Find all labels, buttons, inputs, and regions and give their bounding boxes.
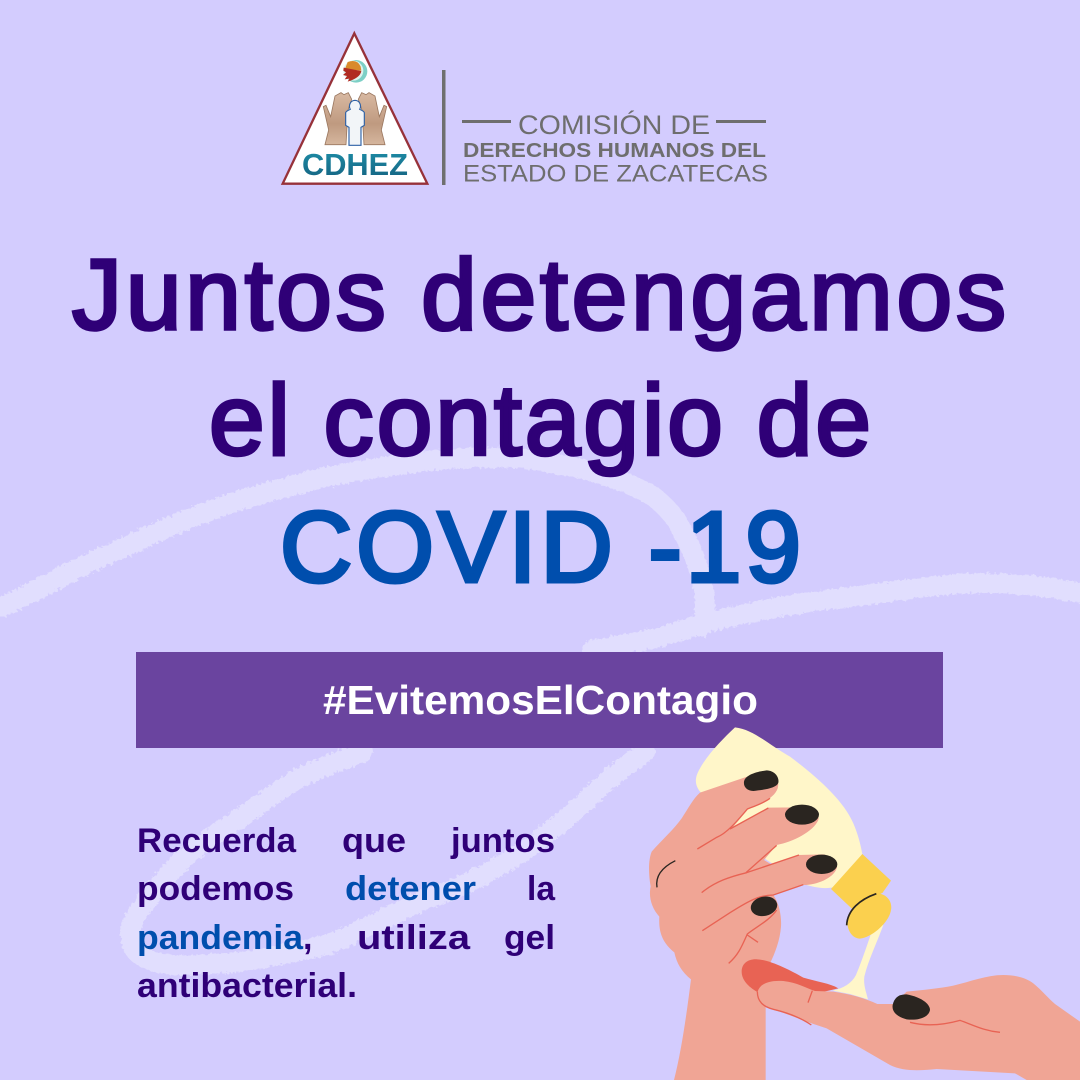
paragraph: Recuerda: [137, 822, 297, 860]
title: Juntos detengamos: [72, 239, 1006, 351]
title: [72, 239, 1006, 604]
paragraph: detener: [345, 870, 476, 908]
paragraph: gel: [504, 919, 555, 957]
paragraph: la: [527, 870, 556, 908]
paragraph: antibacterial.: [137, 967, 357, 1005]
hashtag banner: [136, 652, 943, 748]
title: COVID -19: [280, 492, 801, 604]
icon: bottle cap: [831, 854, 891, 939]
paragraph: utiliza: [357, 919, 471, 957]
logo divider: [442, 70, 446, 185]
icon: lower hand: [758, 975, 1080, 1080]
logo emblem: CDHEZ triangle: CDHEZ: [302, 148, 408, 182]
icon: hand crease lines: [697, 798, 1000, 1032]
icon: gel stream: [833, 925, 883, 999]
title: el contagio de: [209, 364, 871, 476]
paragraph: [137, 822, 556, 1005]
icon: knuckle line: [657, 861, 675, 887]
paragraph: ,: [303, 919, 312, 957]
paragraph: juntos: [450, 822, 555, 860]
logo: [283, 33, 768, 188]
logo emblem: CDHEZ triangle: [283, 33, 427, 184]
paragraph: pandemia: [137, 919, 304, 957]
icon: thumb shadow: [742, 959, 838, 993]
icon: fingernails: [744, 770, 930, 1020]
background swirl: [3, 458, 1080, 965]
paragraph: podemos: [137, 870, 294, 908]
logo wordmark: COMISIÓN DE: [518, 110, 710, 140]
icon: gel bottle: [696, 727, 862, 888]
illustration: hands with gel bottle: [649, 727, 1080, 1080]
hashtag banner: #EvitemosElContagio: [323, 677, 758, 723]
icon: upper hand: [649, 771, 837, 1080]
logo wordmark: DERECHOS HUMANOS DEL: [463, 139, 766, 162]
logo wordmark: [462, 110, 768, 188]
logo wordmark: ESTADO DE ZACATECAS: [463, 160, 768, 188]
paragraph: que: [342, 822, 406, 860]
